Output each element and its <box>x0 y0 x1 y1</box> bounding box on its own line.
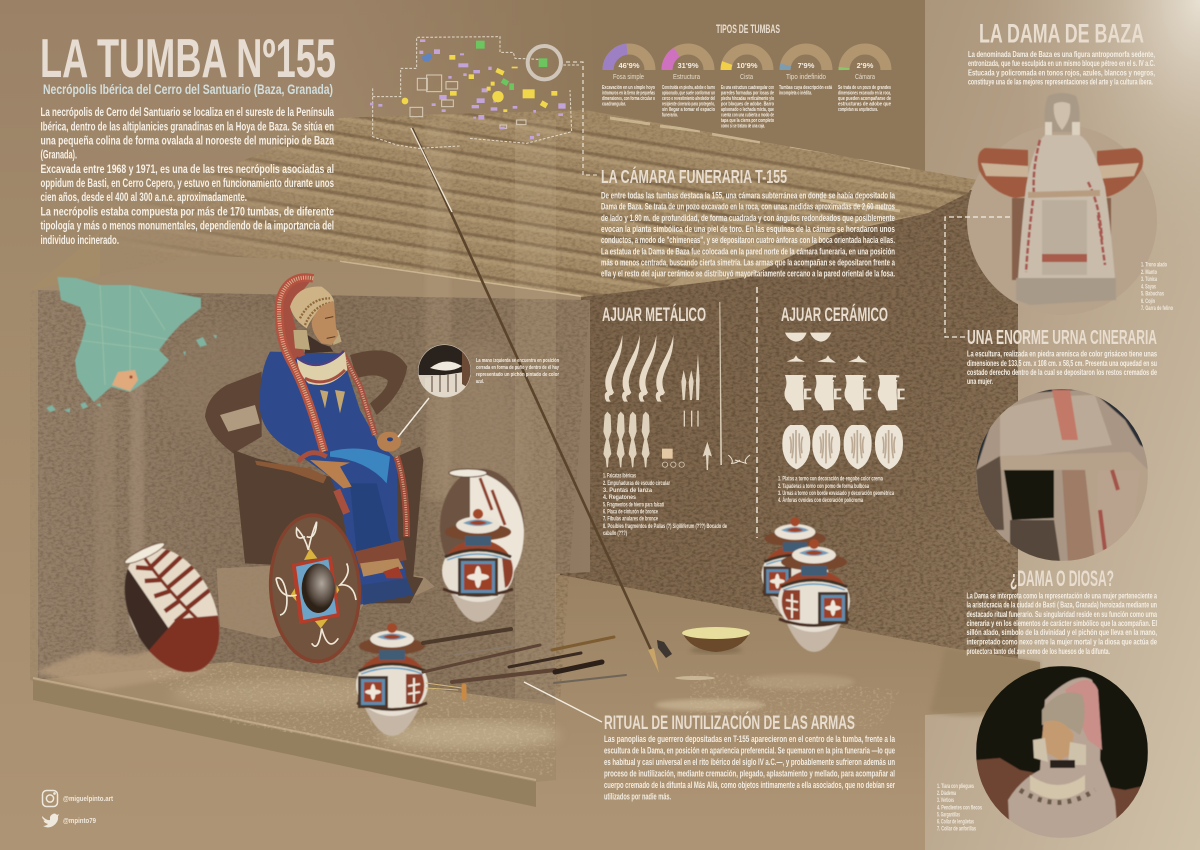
necklaces <box>297 352 347 385</box>
text block: burial chamber: evocan la planta simbólica de una piel de toro. En las esquinas de la cámara se horadaron unos <box>601 224 895 235</box>
list: statue parts: 3. Túnica <box>1141 277 1157 283</box>
description: camara: completan su arquitectura. <box>838 107 878 113</box>
description: cista: por bloques de adobe. Barro <box>721 102 774 108</box>
seated Lady of Baza, painted reconstruction <box>205 276 435 638</box>
floor slab, left part <box>33 648 560 807</box>
description: camara <box>838 85 891 113</box>
icon: twitter <box>42 814 59 828</box>
stone plinth <box>217 563 435 638</box>
text block: burial chamber: ella y el resto del ajuar cerámico se distribuyó mayoritariamente cercano a la pared oriental de la fosa. <box>601 268 895 280</box>
list: statue parts: 6. Cojín <box>1141 299 1155 305</box>
list: bust parts: 7. Collar de anforillas <box>937 826 976 832</box>
description: fosa simple: dimensiones, con forma circular o <box>602 96 655 102</box>
text block: burial chamber: De entre todas las tumbas destaca la 155, una cámara subterránea en donde se había depositado la <box>601 190 895 202</box>
list: bust parts: 6. Collar de lengüetas <box>937 820 974 826</box>
intro text block <box>40 107 334 247</box>
blue dress <box>260 352 413 605</box>
list: statue parts: 7. Garra de felino <box>1141 306 1173 312</box>
description: cista <box>721 85 774 130</box>
description: estructura: cerco o revestimiento alrededor del <box>662 96 715 102</box>
list: bust parts: 4. Pendientes con flecos <box>937 806 982 812</box>
description: camara: Se trata de un pozo de grandes <box>838 85 891 91</box>
throne <box>205 350 423 603</box>
text block: burial chamber: Dama de Baza. Se trata de un pozo excavado en la roca, con unas medidas aproximadas de 2,60 metros <box>601 202 895 213</box>
list: metal goods: 6. Placa de cinturón de bronce <box>603 510 658 516</box>
left part of the chamber, wall <box>30 290 590 780</box>
round shield <box>265 511 365 666</box>
description: fosa simple: intramuros en la tierra de pequeñas <box>602 90 655 96</box>
list: metal goods: 4. Regatones <box>603 495 637 501</box>
gauge labels: Fosa simple <box>613 72 644 81</box>
list: metal goods: 7. Fíbulas anulares de bronce <box>603 517 658 523</box>
intro text block: Excavada entre 1968 y 1971, es una de las tres necrópolis asociadas al <box>40 164 334 176</box>
description: estructura: Construida en piedra, adobe o barro <box>662 85 715 91</box>
gauge percentages: 10'9% <box>737 61 758 70</box>
large white amphora with leaf pattern <box>124 542 220 673</box>
face <box>312 302 338 345</box>
wings <box>978 148 1143 198</box>
text block: lady or goddess: protectora tanto del ave como de los huesos de la difunta. <box>966 647 1110 656</box>
gauge percentages <box>619 61 874 70</box>
description: estructura: funerario. <box>662 112 678 118</box>
description: cista: como si se tratara de una caja. <box>721 124 765 130</box>
list: metal goods: 3. Puntas de lanza <box>603 488 653 494</box>
pair of lidded urns at the right <box>762 517 850 652</box>
list: metal goods <box>603 474 727 537</box>
head <box>1044 93 1080 132</box>
list: ceramic goods: 1. Platos a torno con decoración de engobe color crema <box>778 477 883 483</box>
social handles: @mpinto79 <box>63 816 96 825</box>
list: metal goods: caballo (???) <box>603 531 627 537</box>
description: camara: dimensiones excavado en la roca, <box>838 90 891 96</box>
lidded urn, foreground <box>356 623 428 736</box>
text block: ritual: Las panoplias de guerrero depositadas en T-155 aparecieron en el centro de la tumba, frente a la <box>604 734 895 745</box>
heading: ritual: RITUAL DE INUTILIZACIÓN DE LAS ARMAS <box>604 712 855 734</box>
list: bust parts <box>937 784 982 832</box>
text block: Lady of Baza <box>968 50 1155 86</box>
hood behind the head <box>276 276 313 362</box>
intro text block: (Granada). <box>40 150 77 162</box>
description: tipo indefinido: incompleta o inédita. <box>779 90 812 96</box>
text block: ritual: cuerpo cremado de la difunta al Más Allá, como objetos íntimamente a ella asociados, que no debían ser <box>604 780 895 791</box>
panel: top centre backdrop <box>340 0 925 190</box>
icon: instagram <box>42 790 58 806</box>
description: cista: piedra hincadas verticalmente y/o <box>721 96 774 102</box>
caption for the hand detail: azul. <box>476 379 484 385</box>
photo: cavity in the statue, round crop <box>976 389 1148 561</box>
sandy light patches on the floor <box>147 662 899 776</box>
panel: right column background <box>925 0 1200 850</box>
list: statue parts: 2. Manto <box>1141 270 1157 276</box>
text block: burial chamber <box>601 190 895 280</box>
description: cista: cuenta con una cubierta a modo de <box>721 112 774 118</box>
gauge labels: Cámara <box>855 72 876 81</box>
gauge: estructura <box>667 49 709 70</box>
intro text block: cien años, desde el 400 al 300 a.n.e. aproximadamente. <box>40 192 247 204</box>
gauge: camara <box>844 49 886 70</box>
description: estructura: recipiente cinerario para protegerlo, <box>662 102 715 108</box>
gauge: cista <box>726 49 768 70</box>
description: tipo indefinido: Tumbas cuya descripción está <box>779 85 832 91</box>
gauge labels <box>613 72 876 81</box>
throne sides <box>1012 198 1111 280</box>
back wall of the chamber, right side <box>560 190 1020 670</box>
roof beams of the tomb <box>100 110 976 297</box>
list: ceramic goods <box>778 477 894 504</box>
lidded urn, behind the Lady <box>442 509 514 622</box>
social handles <box>42 790 113 828</box>
list: metal goods: 8. Posibles fragmentos de Pallas (?) Sigilliferum (???) Bocado de <box>603 524 727 530</box>
hands <box>310 460 352 488</box>
list: ceramic goods: 4. Ánforas ovoides con decoración polícroma <box>778 497 863 504</box>
heading: metal goods: AJUAR METÁLICO <box>602 304 706 326</box>
text block: burial chamber: de lado y 1,80 m. de profundidad, de forma cuadrada y con ángulos redondeados que posiblemente <box>601 213 895 224</box>
list: ceramic goods: 2. Tapaderas a torno con pomo de forma bulbosa <box>778 484 869 490</box>
caption for the hand detail: La mano izquierda se encuentra en posición <box>476 358 559 364</box>
list: statue parts: 5. Babuchas <box>1141 292 1164 298</box>
patterned mantle bands <box>279 278 324 452</box>
intro text block: tipología y más o menos monumentales, dependiendo de la importancia del <box>40 221 334 233</box>
photo: bust of the Lady, round crop <box>976 666 1148 838</box>
leader line to the ritual section <box>524 682 602 722</box>
list: statue parts: 4. Sayas <box>1141 284 1156 290</box>
description: fosa simple: cuadrangular. <box>602 102 626 108</box>
description: estructura: sin llegar a tomar el espacio <box>662 107 715 113</box>
gauge labels: Tipo indefinido <box>786 72 826 81</box>
description: tipo indefinido <box>779 85 832 96</box>
caption for the hand detail <box>476 358 559 385</box>
site plan of the necropolis <box>370 37 580 148</box>
heading: burial chamber: LA CÁMARA FUNERARIA T-155 <box>601 166 787 187</box>
description: cista: paredes formadas por losas de <box>721 90 774 96</box>
panel: types of tombs <box>602 24 891 130</box>
text block: ritual <box>604 734 895 802</box>
panel: metal grave goods <box>602 302 750 537</box>
tiara <box>290 287 334 328</box>
intro text block: La necrópolis de Cerro del Santuario se localiza en el sureste de la Península <box>40 107 334 119</box>
social handles: @miguelpinto.art <box>63 794 113 803</box>
description: cista: Es una estructura cuadrangular con <box>721 85 774 91</box>
zoom detail: hand holding the pigeon <box>398 344 472 437</box>
title: LA TUMBA Nº155 <box>40 27 336 89</box>
dashed divider between goods <box>756 287 758 538</box>
text block: ritual: es habitual y casi universal en el rito ibérico del siglo IV a.C.—, y probablemente sufrieron además un <box>604 757 895 768</box>
text block: burial chamber: más o menos centrada, buscando cierta simetría. Las armas que la acompañan se depositaron frente a <box>601 258 895 268</box>
ceramic bowl <box>682 627 750 654</box>
amphora at the back <box>440 469 524 586</box>
weapons on the floor <box>423 629 626 698</box>
gauge percentages: 7'9% <box>798 61 815 70</box>
description: estructura <box>662 85 715 118</box>
heading: ceramic goods: AJUAR CERÁMICO <box>781 304 888 326</box>
text block: cinerary urn <box>967 350 1157 386</box>
text block: ritual: proceso de inutilización, mediante cremación, plegado, aplastamiento y mellado, para acompañar al <box>604 768 895 780</box>
list: bust parts: 2. Diadema <box>937 791 956 797</box>
list: statue parts <box>1141 263 1173 312</box>
base <box>1016 278 1116 305</box>
gauge percentages: 46'9% <box>619 61 640 70</box>
caption for the hand detail: representado un pichón pintado de color <box>476 372 559 378</box>
gauge percentages: 2'9% <box>857 61 874 70</box>
intro text block: La necrópolis estaba compuesta por más de 170 tumbas, de diferente <box>40 206 334 218</box>
text block: burial chamber: La estatua de la Dama de Baza fue colocada en la pared norte de la cámara funeraria, en una posición <box>601 246 895 257</box>
list: bust parts: 1. Tiara con pliegues <box>937 784 974 790</box>
long spear crossing the chamber <box>411 128 659 673</box>
floor of the chamber, right side <box>536 574 1040 850</box>
description: cista: tapa que la cierra por completo <box>721 118 774 124</box>
caption for the hand detail: cerrada en forma de puño y dentro de él hay <box>476 365 559 371</box>
lower skirt bands and shoes <box>355 540 407 568</box>
list: bust parts: 3. Vértices <box>937 798 954 804</box>
neck and earrings <box>305 333 333 353</box>
translucent stone pillars <box>425 120 556 780</box>
map of Spain with Baza highlighted <box>46 277 217 413</box>
description: fosa simple: Excavación en un simple hoyo <box>602 85 655 91</box>
gauge labels: Estructura <box>673 72 701 81</box>
gauge percentages: 31'9% <box>678 61 699 70</box>
gauge: tipo indefinido <box>785 49 827 70</box>
robe <box>1018 135 1115 278</box>
list: ceramic goods: 3. Urnas a torno con borde exvasado y decoración geométrica <box>778 491 894 497</box>
intro text block: Ibérica, dentro de las altiplanicies granadinas en la Hoya de Baza. Se sitúa en <box>40 121 334 133</box>
subtitle: Necrópolis Ibérica del Cerro del Santuario (Baza, Granada) <box>43 82 333 97</box>
text block: burial chamber: conductos, a modo de "chimeneas", y se depositaron cuatro ánforas con la boca orientada hacia ellas. <box>601 235 895 246</box>
icons: falcatas and weapons <box>603 302 750 470</box>
gauge: fosa simple <box>608 49 650 70</box>
icons: plates, lids, jars, amphorae <box>782 333 905 469</box>
dashed connector between statue and urn section <box>945 217 1010 337</box>
heading: types of tombs: TIPOS DE TUMBAS <box>716 24 780 36</box>
text block: lady or goddess <box>966 591 1157 656</box>
description: cista: apisonado o lechada mixta, que <box>721 107 774 113</box>
intro text block: una pequeña colina de forma ovalada al noroeste del municipio de Baza <box>40 136 334 148</box>
panel: ceramic grave goods <box>778 304 905 504</box>
description: fosa simple <box>602 85 655 108</box>
text block: ritual: utilizados por nadie más. <box>604 792 671 802</box>
description: camara: que pueden acompañarse de <box>838 96 891 102</box>
list: bust parts: 5. Gargantillas <box>937 812 960 818</box>
text block: ritual: escultura de la Dama, en posición en apariencia preferencial. Se quemaron en la pira funeraria —lo que <box>604 746 895 756</box>
intro text block: oppidum de Basti, en Cerro Cepero, y estuvo en funcionamiento durante unos <box>40 178 334 190</box>
list: metal goods: 1. Falcatas ibéricas <box>603 474 636 480</box>
description: camara: estructuras de adobe que <box>838 102 891 108</box>
list: metal goods: 2. Empuñaduras de escudo circular <box>603 481 670 487</box>
list: metal goods: 5. Fragmentos de hierro para falcati <box>603 502 664 508</box>
gauge labels: Cista <box>740 72 754 81</box>
description: estructura: apisonado, que suele conformar un <box>662 90 715 96</box>
intro text block: individuo incinerado. <box>40 235 119 247</box>
statue photo: Lady of Baza on a disc <box>967 93 1157 315</box>
text block: cinerary urn: una mujer. <box>967 377 993 386</box>
bronze horse-bit fragment <box>657 640 672 658</box>
heading: lady or goddess: ¿DAMA O DIOSA? <box>1010 566 1114 591</box>
dashed connector from the plan to the chamber section <box>566 62 600 175</box>
list: statue parts: 1. Trono alado <box>1141 263 1167 269</box>
